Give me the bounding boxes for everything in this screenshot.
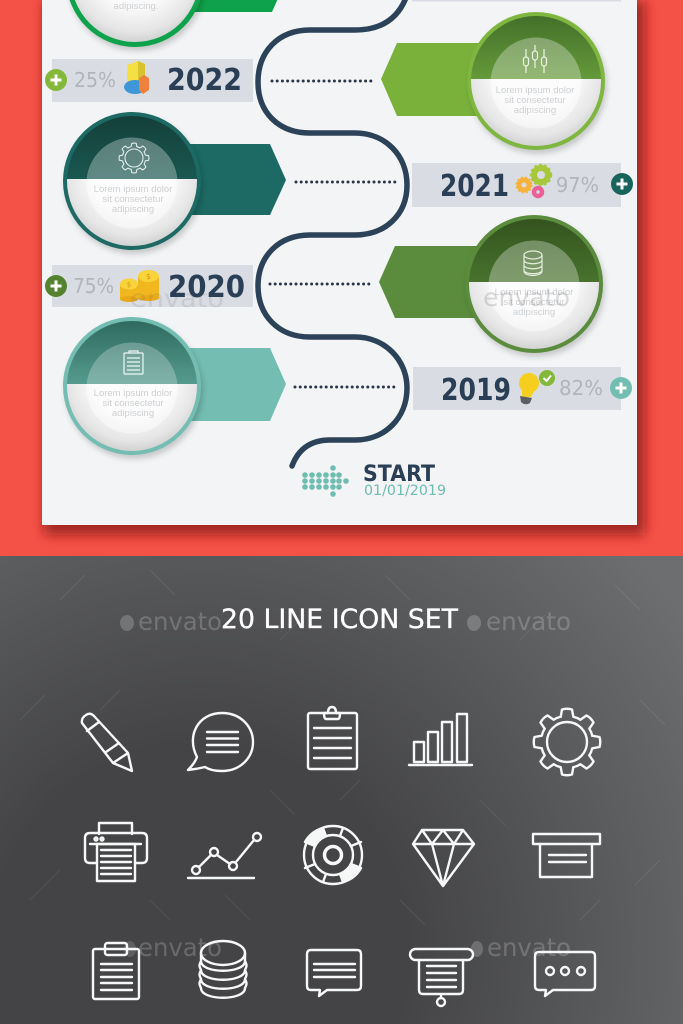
- start label: START: [363, 462, 435, 487]
- icon: dotted arrow: [302, 465, 349, 497]
- arrow tag: [180, 144, 286, 215]
- red background: [0, 0, 683, 556]
- body text: [495, 287, 573, 318]
- body text: sit consectetur: [504, 95, 566, 106]
- plus badge 2021: [611, 173, 633, 195]
- node: aqua circle: [63, 317, 286, 459]
- panel: timeline paper: [42, 0, 637, 525]
- node: top green circle: [66, 0, 288, 51]
- body text: adipiscing: [514, 105, 556, 116]
- body text: adipiscing: [513, 307, 555, 318]
- watermarks on dark panel: envato: [138, 607, 222, 636]
- arrow tag: [379, 246, 490, 318]
- icon: target wheel: [304, 826, 362, 884]
- row: 2021 label bar: 97%: [556, 173, 599, 197]
- icon: chat box: [307, 950, 361, 996]
- heading: icon set title: 20 LINE ICON SET: [221, 604, 458, 635]
- icon: coins: $: [127, 281, 131, 289]
- icon: 3D chart: [124, 61, 149, 94]
- icon: coins: $: [146, 272, 151, 281]
- row: 2022 label bar: 25%: [74, 68, 116, 92]
- node: moss green circle: [379, 215, 605, 357]
- icon: clipboard two: [93, 943, 139, 999]
- row: 2022 label bar: [45, 59, 253, 102]
- plus badge 2022: [45, 69, 67, 91]
- icon: gears: [516, 165, 551, 196]
- icon: bar chart: [409, 714, 472, 765]
- node: top green circle: adipiscing.: [114, 1, 158, 12]
- row: 2020 label bar: [45, 265, 253, 313]
- icon: sliders: [524, 45, 546, 73]
- row: 2019 label bar: 2019: [441, 373, 511, 408]
- body text: sit consectetur: [102, 398, 164, 409]
- top bar fragment: [412, 0, 621, 2]
- body text: [496, 85, 574, 116]
- body text: adipiscing: [112, 408, 154, 419]
- winding timeline path: [258, 0, 407, 466]
- body text: Lorem ipsum dolor: [496, 85, 574, 96]
- icon: diamond: [413, 830, 474, 886]
- row: 2022 label bar: 2022: [167, 63, 242, 98]
- body text: [94, 388, 172, 419]
- icon: pencil: [82, 714, 132, 771]
- icon: clipboard small: [124, 351, 143, 374]
- watermarks on dark panel: envato: [486, 607, 571, 636]
- arrow tag: [180, 348, 286, 421]
- body text: sit consectetur: [102, 194, 164, 205]
- icon: database small: [524, 251, 542, 276]
- body text: Lorem ipsum dolor: [495, 287, 573, 298]
- row: 2019 label bar: [413, 367, 632, 410]
- icon: coins: [120, 270, 159, 302]
- plus badge 2020: [45, 275, 67, 297]
- body text: sit consectetur: [503, 297, 565, 308]
- body text: Lorem ipsum dolor: [94, 388, 172, 399]
- icon: clipboard: [308, 707, 357, 769]
- icon: gear: [119, 143, 149, 173]
- body text: Lorem ipsum dolor: [94, 184, 172, 195]
- start date: 01/01/2019: [364, 483, 446, 499]
- row: 2020 label bar: 2020: [168, 270, 245, 305]
- icon: speech bubble: [188, 713, 253, 771]
- watermark: envato: [130, 284, 224, 313]
- icon: printer: [85, 823, 147, 881]
- icon: projector: [410, 949, 473, 1006]
- icon: dots bubble: [535, 952, 595, 996]
- watermarks on dark panel: [120, 607, 571, 962]
- icon: archive box: [533, 834, 600, 877]
- row: 2019 label bar: 82%: [559, 376, 603, 400]
- watermarks on dark panel: envato: [138, 933, 222, 962]
- row: 2021 label bar: 2021: [440, 169, 509, 204]
- panel: icon set background: [0, 556, 683, 1024]
- icon: database: [200, 941, 246, 998]
- node: light green circle: [381, 12, 607, 154]
- node: dark teal circle: [63, 112, 286, 254]
- icon: cog: [534, 709, 600, 775]
- row: 2020 label bar: 75%: [73, 274, 114, 298]
- watermarks on dark panel: envato: [487, 933, 571, 962]
- icon: line chart: [188, 833, 261, 878]
- body text: adipiscing: [112, 204, 154, 215]
- dotted connectors: [270, 81, 396, 387]
- paper shadow: [44, 0, 645, 535]
- plus badge 2019: [610, 377, 632, 399]
- icon: light bulb: [519, 370, 555, 404]
- arrow tag: [381, 43, 490, 116]
- row: 2021 label bar: [412, 163, 633, 207]
- body text: [94, 184, 172, 215]
- watermark: envato: [483, 283, 570, 312]
